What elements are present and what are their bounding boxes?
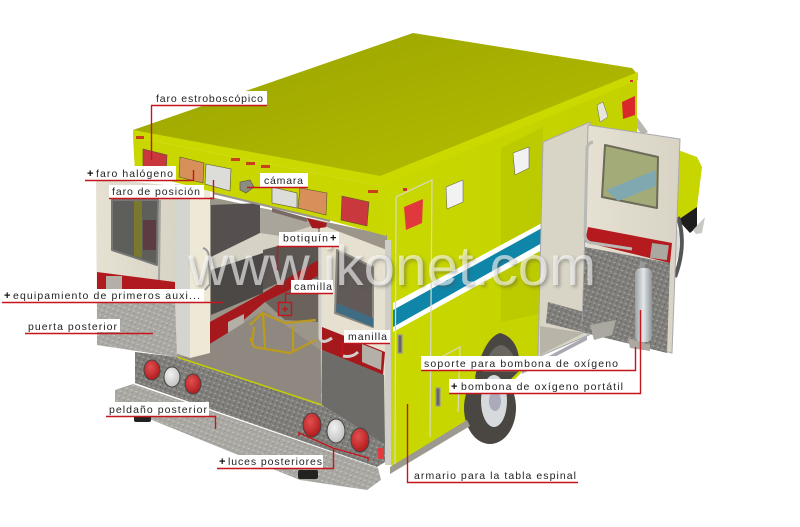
- rear right door: [320, 227, 391, 465]
- ceiling dark strip: [272, 208, 307, 222]
- left grey box: [106, 276, 122, 292]
- side lights: [403, 80, 635, 230]
- side stripes: [393, 223, 542, 332]
- side compartment doors: [395, 180, 460, 465]
- side skirt: [390, 420, 470, 474]
- open side door inner well: [538, 122, 590, 357]
- floor: [177, 310, 322, 405]
- yellow side edge frame: [385, 240, 391, 465]
- roof rim: [133, 72, 638, 186]
- door grab bar: [585, 142, 632, 249]
- label: camilla: camilla: [294, 281, 332, 293]
- label: manilla: [342, 330, 390, 356]
- label: bombona de oxígeno portátil: bombona de oxígeno portátil: [461, 381, 623, 393]
- cab and front wheel: [637, 117, 705, 277]
- door red band: [585, 227, 672, 263]
- label: manilla: manilla: [348, 331, 387, 343]
- left window: [112, 200, 158, 265]
- rear step: [115, 384, 381, 490]
- left red band: [97, 272, 175, 302]
- watermark: www.ikonet.com: [189, 236, 598, 299]
- ghost panel behind open door: [501, 127, 543, 322]
- label: equipamiento de primeros auxilios: equipamiento de primeros auxi...: [13, 290, 200, 302]
- cream pillar: [190, 186, 210, 358]
- label: cámara: cámara: [264, 175, 303, 187]
- label: armario para la tabla espinal: armario para la tabla espinal: [414, 470, 576, 482]
- label: botiquín: botiquín: [283, 232, 328, 244]
- label: camilla: [278, 280, 333, 316]
- label: soporte para bombona de oxígeno: soporte para bombona de oxígeno: [424, 358, 618, 370]
- stretcher: [250, 313, 316, 353]
- watermark: www.ikonet.com: [187, 234, 596, 297]
- door grey box: [650, 243, 669, 260]
- dark bed area: [265, 276, 318, 322]
- oxygen cylinder: [635, 262, 652, 342]
- white shelf band: [211, 224, 318, 272]
- label: faro de posición: faro de posición: [112, 186, 200, 198]
- label: faro de posición: [109, 180, 214, 198]
- pillar handle: [203, 248, 210, 290]
- rear header lights: [143, 149, 369, 226]
- rear right handle: [320, 246, 358, 356]
- label: botiquín: +: [330, 232, 336, 244]
- label: faro estroboscópico: faro estroboscópico: [156, 93, 263, 105]
- rear header panel: [133, 137, 386, 236]
- label: luces posteriores: +: [219, 456, 225, 468]
- label: armario para la tabla espinal: [408, 404, 578, 482]
- rear interior: [175, 184, 387, 410]
- rear right red band: [322, 327, 385, 375]
- rear wheel: [464, 333, 520, 444]
- left diamond plate: [97, 293, 177, 357]
- label: bombona de oxígeno portátil: [449, 310, 640, 394]
- header silver edge: [213, 193, 330, 221]
- label: equipamiento de primeros auxilios: +: [4, 290, 10, 302]
- door diamond plate: [582, 247, 670, 353]
- yellow sill: [177, 357, 322, 405]
- lower cabinet left: [211, 253, 263, 315]
- interior red band: [208, 260, 318, 350]
- cylinder holder: [628, 338, 650, 351]
- label: peldaño posterior: peldaño posterior: [109, 404, 208, 416]
- label: luces posteriores: [217, 433, 368, 468]
- rear right diamond plate: [322, 350, 385, 445]
- rear lights left: [144, 360, 201, 394]
- open side door: [582, 125, 680, 353]
- side body: [380, 78, 637, 467]
- label: cámara: [247, 173, 308, 188]
- small marker lights: [136, 136, 378, 193]
- roof: [133, 33, 638, 183]
- silver frame: [175, 184, 190, 358]
- open rear left door: [96, 178, 177, 357]
- label: luces posteriores: luces posteriores: [228, 456, 322, 468]
- label: peldaño posterior: [106, 402, 216, 429]
- label: botiquín: [278, 232, 339, 270]
- label: puerta posterior: [25, 319, 153, 334]
- corner reflector: [378, 448, 384, 459]
- lower cabinet right: [263, 235, 318, 290]
- upper cabinet: [211, 203, 260, 257]
- rear right grey box: [362, 344, 382, 370]
- rear wall: [260, 208, 320, 247]
- label: faro estroboscópico: [152, 91, 267, 160]
- bin: [590, 320, 616, 340]
- rear bumper panel: [135, 352, 385, 467]
- label: faro halógeno: +: [87, 168, 93, 180]
- step feet: [134, 415, 318, 479]
- ambulance illustration: [96, 33, 705, 490]
- rear lights right: [303, 413, 369, 452]
- grey panel on red band: [228, 314, 244, 334]
- label: bombona de oxígeno portátil: +: [451, 381, 457, 393]
- red ceiling device: [307, 218, 327, 229]
- label: soporte para bombona de oxígeno: [421, 347, 636, 370]
- door rod: [159, 200, 160, 280]
- rear right window: [335, 250, 373, 327]
- label: faro halógeno: [85, 166, 194, 180]
- label: puerta posterior: puerta posterior: [28, 321, 118, 333]
- label: faro halógeno: faro halógeno: [96, 168, 173, 180]
- door window: [602, 145, 658, 208]
